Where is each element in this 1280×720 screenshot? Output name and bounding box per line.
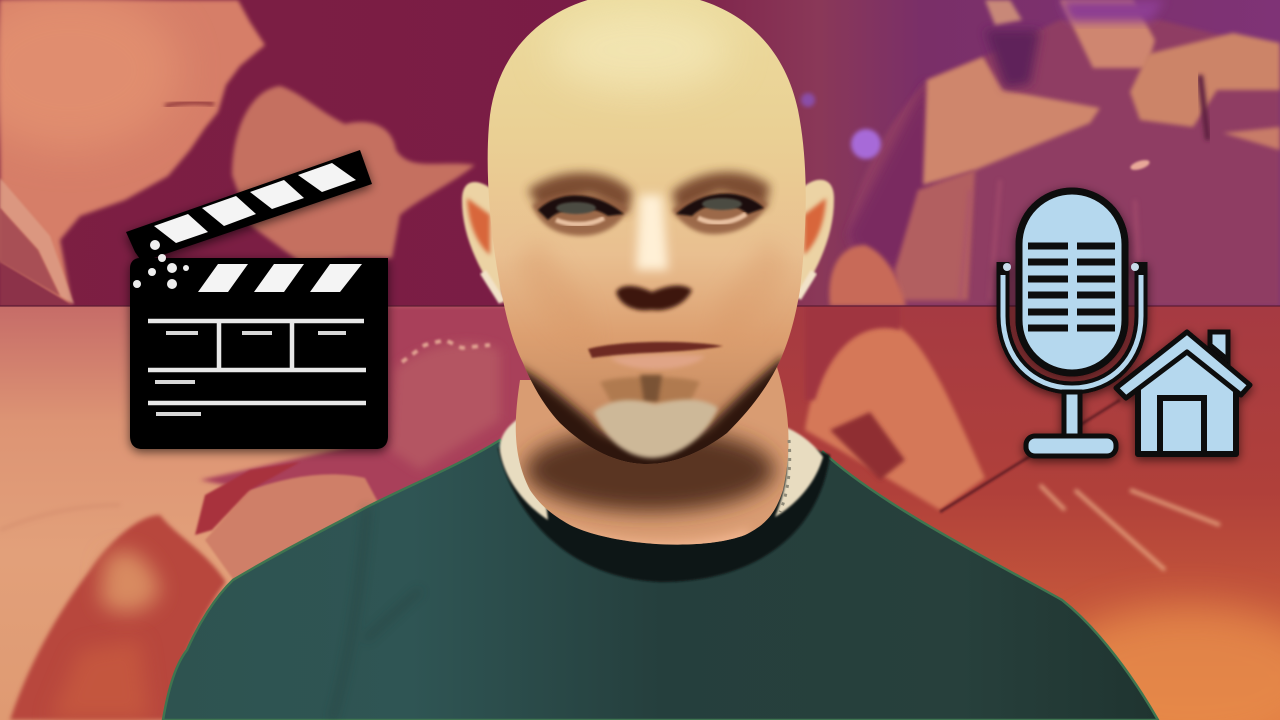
panel: upper background band — [0, 0, 1280, 306]
nostrils — [616, 286, 692, 310]
jaw beard shadow — [522, 350, 784, 464]
right eye socket — [672, 192, 768, 234]
clapper body — [130, 240, 388, 449]
left film still: raised hand — [232, 86, 475, 262]
shirt folds — [358, 502, 370, 510]
goatee — [594, 400, 718, 458]
right concert still — [805, 306, 1280, 720]
right ear — [797, 180, 834, 300]
red concert figure — [10, 515, 226, 720]
soul patch — [600, 377, 700, 404]
guitarist scarf — [985, 30, 1040, 88]
mouth — [588, 342, 723, 358]
clapper stick — [126, 150, 372, 262]
head — [488, 0, 806, 464]
neck — [516, 367, 788, 545]
necklace beads — [780, 440, 790, 512]
microphone — [1003, 191, 1141, 456]
shirt — [163, 440, 1158, 720]
band divider — [0, 305, 1280, 307]
guitarist peach sleeve — [923, 57, 1100, 185]
icon: film clapperboard — [126, 150, 388, 449]
lower lip — [610, 355, 705, 369]
nose highlight — [636, 195, 668, 270]
face details — [522, 6, 784, 464]
cheek warmth — [522, 248, 784, 300]
peach arm — [205, 474, 385, 582]
necklace — [500, 416, 823, 520]
scalp highlight — [550, 10, 730, 90]
brows — [528, 173, 632, 214]
house — [1116, 332, 1250, 454]
guitarist dark sleeve — [848, 90, 932, 268]
icon: microphone and house — [1003, 191, 1250, 456]
left concert still — [0, 306, 640, 720]
left eye socket — [532, 193, 628, 236]
person: bald man in dark t-shirt — [163, 0, 1158, 720]
dark red slash — [195, 462, 300, 535]
guitarist right arm — [1130, 33, 1280, 127]
left ear — [462, 182, 503, 304]
left film still: man in profile — [0, 0, 265, 306]
guitarist neck and collar — [1060, 0, 1155, 68]
right film still: guitarist — [801, 0, 1280, 306]
shirt collar — [498, 440, 830, 582]
panel: lower background band — [0, 306, 1280, 720]
